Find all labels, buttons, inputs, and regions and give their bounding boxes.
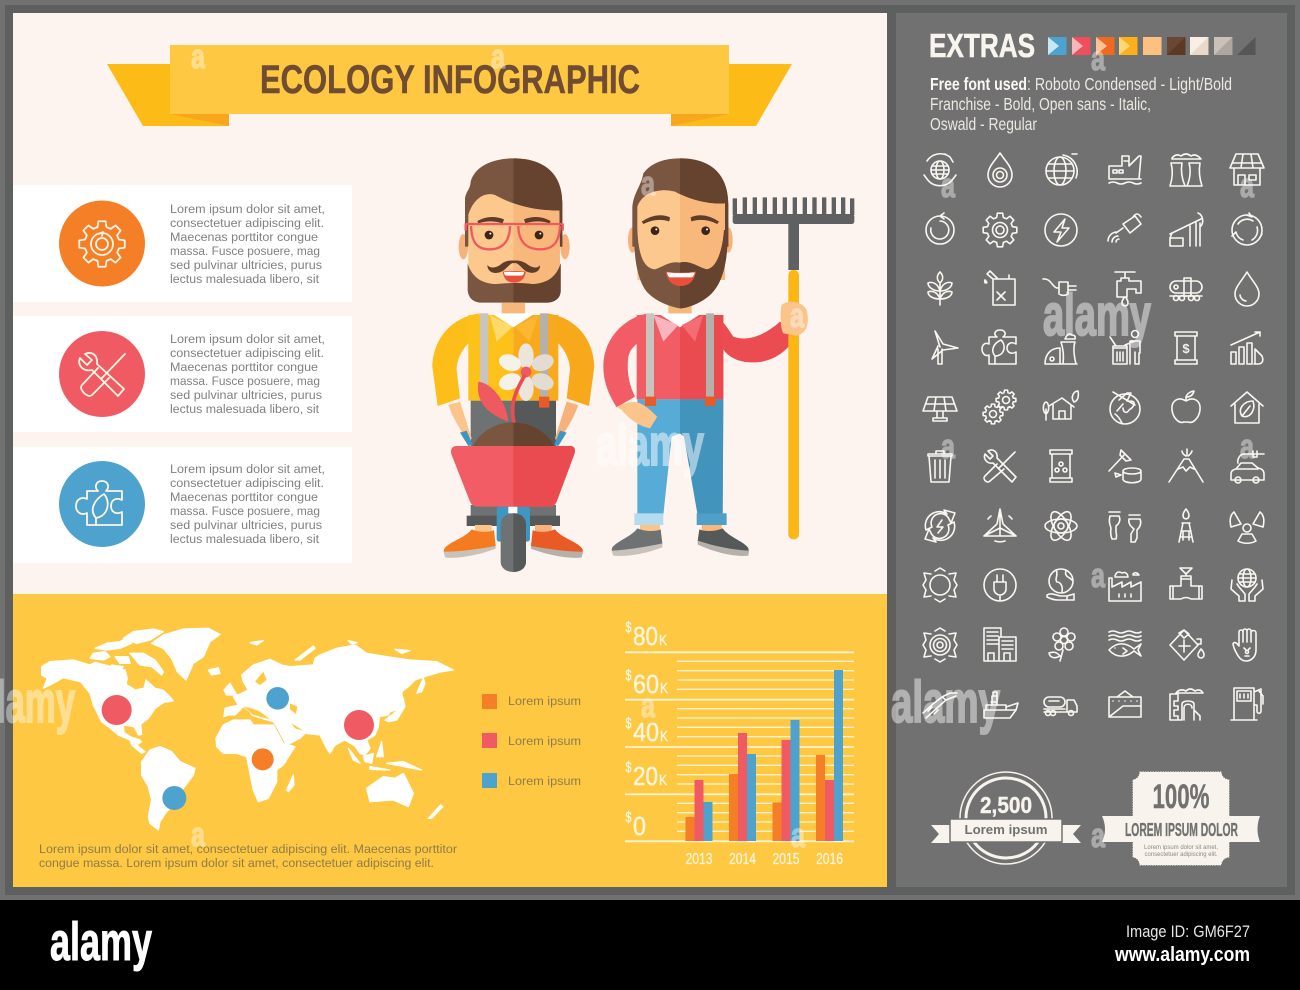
y axis labels	[626, 619, 668, 841]
icon: sun	[923, 568, 957, 602]
icon: ship	[984, 692, 1018, 718]
icon: turbine triangle	[984, 509, 1016, 542]
icon: plug cable	[1043, 279, 1076, 295]
legend: Lorem ipsum	[508, 774, 581, 788]
y axis labels: $	[626, 715, 632, 732]
stock watermarks: alamy	[1043, 283, 1151, 348]
y axis labels: K	[660, 680, 668, 697]
card text	[170, 202, 325, 286]
icon: trash can	[928, 451, 952, 482]
stock watermarks: a	[791, 817, 806, 855]
card text	[170, 462, 325, 546]
icon: globe with arrows	[924, 154, 956, 186]
icon: pipe valve	[1170, 568, 1202, 599]
icon: house with leaf	[1231, 392, 1263, 423]
card text: Lorem ipsum dolor sit amet,	[170, 202, 325, 216]
card text: lectus malesuada libero, sit	[170, 402, 320, 416]
stock watermarks: a	[1091, 557, 1106, 595]
rake	[733, 197, 854, 539]
colour swatches	[1048, 37, 1256, 55]
icon: tanker truck	[1044, 697, 1077, 716]
stock watermarks: a	[1091, 40, 1106, 78]
icon: water with fish	[1109, 631, 1141, 656]
map caption	[39, 842, 457, 870]
legend: Lorem ipsum	[508, 734, 581, 748]
heading: ECOLOGY INFOGRAPHIC	[260, 58, 640, 102]
panel: three text cards	[13, 185, 352, 563]
card text: sed pulvinar ultricies, purus	[170, 518, 322, 532]
bars 2016	[816, 670, 843, 841]
legend	[482, 694, 581, 788]
badge: 2,500 seal	[931, 772, 1081, 864]
icon: gear	[983, 213, 1017, 247]
font credits	[930, 74, 1232, 134]
y axis labels: 40	[633, 717, 659, 747]
icon: tanker wagon	[1170, 278, 1202, 300]
card text: massa. Fusce posuere, mag	[170, 244, 320, 258]
icon: solar house	[1230, 154, 1264, 185]
card text: lectus malesuada libero, sit	[170, 532, 320, 546]
stock watermarks: a	[941, 167, 956, 205]
y axis labels: 60	[633, 669, 659, 699]
stock watermarks: a	[491, 38, 506, 76]
icon: tools	[984, 450, 1016, 482]
icon: sun with circles	[923, 628, 957, 662]
panel: yellow data area	[13, 594, 887, 887]
card text: Lorem ipsum dolor sit amet,	[170, 462, 325, 476]
stock watermarks: a	[191, 38, 206, 76]
panel: extras sidebar	[896, 13, 1287, 887]
x axis years: 2013	[686, 851, 713, 868]
Central and South America, Africa, Oceania	[130, 720, 443, 830]
card text: Maecenas porttitor congue	[170, 490, 318, 504]
icon: radiation	[1230, 512, 1264, 543]
stock watermarks: alamy	[596, 413, 704, 478]
y axis labels: 0	[633, 811, 646, 841]
icon: growth chart	[1231, 332, 1263, 364]
icon: apple	[1172, 391, 1200, 422]
extras heading: EXTRAS	[929, 27, 1035, 64]
website: www.alamy.com	[1114, 944, 1250, 966]
card text: massa. Fusce posuere, mag	[170, 374, 320, 388]
icon: water tap	[1115, 272, 1141, 306]
x axis years: 2015	[772, 851, 800, 868]
illustration: two men with wheelbarrow and rake	[432, 158, 854, 572]
icon: fuel nozzle	[923, 693, 957, 718]
card text: consectetuer adipiscing elit.	[170, 216, 324, 230]
icon: gear with refresh	[79, 221, 125, 267]
card 1	[13, 185, 352, 302]
card text: sed pulvinar ultricies, purus	[170, 388, 322, 402]
map caption: congue massa. Lorem ipsum dolor sit amet, consectetuer adipiscing elit.	[39, 856, 434, 870]
icon: gas flame tower	[1179, 509, 1193, 542]
icon: watering can	[1108, 214, 1141, 242]
icon: solar panel	[923, 397, 957, 421]
icon: footprints	[1109, 512, 1141, 542]
icon: nuclear barrel	[1050, 450, 1072, 482]
y axis labels: 80	[633, 621, 658, 651]
stock watermarks: a	[641, 165, 656, 203]
icon: volcano	[1169, 449, 1203, 482]
man with rake	[603, 158, 854, 556]
footer bar	[0, 900, 1300, 990]
card text: Lorem ipsum dolor sit amet,	[170, 332, 325, 346]
icon: jerry can	[985, 271, 1015, 305]
stock watermarks: a	[641, 687, 656, 725]
card text: Maecenas porttitor congue	[170, 360, 318, 374]
stock watermarks: a	[1240, 428, 1255, 466]
icon: electric car	[1231, 451, 1264, 483]
icon: atom	[1045, 509, 1077, 543]
x axis years: 2016	[816, 851, 843, 868]
card text: Maecenas porttitor congue	[170, 230, 318, 244]
map markers	[102, 687, 374, 810]
icon: puzzle piece with leaf	[76, 481, 122, 525]
bar chart	[625, 619, 854, 868]
inland seas	[243, 672, 303, 731]
card text	[170, 332, 325, 416]
y axis labels: $	[626, 619, 632, 636]
font credits: Oswald - Regular	[930, 114, 1037, 134]
icon: water drop	[1235, 272, 1259, 306]
y axis labels: K	[659, 632, 667, 649]
icon: axe and stump	[1109, 450, 1141, 483]
icon: hand with radiation	[1233, 629, 1256, 661]
title banner	[107, 45, 792, 126]
legend: Lorem ipsum	[508, 694, 581, 708]
card text: consectetuer adipiscing elit.	[170, 346, 324, 360]
bars 2014	[729, 733, 756, 841]
stock watermarks: a	[191, 816, 206, 854]
man with wheelbarrow	[432, 158, 594, 572]
icon: nuclear plant	[1045, 334, 1077, 364]
bars 2013	[686, 780, 712, 841]
Eurasia	[224, 641, 453, 755]
y axis labels: K	[659, 772, 667, 789]
flower held in wheelbarrow	[478, 343, 556, 427]
badge: 100% label: consectetuer adipiscing elit.	[1144, 851, 1218, 858]
icon: pumpjack	[1170, 213, 1203, 246]
alamy logo: alamy	[50, 912, 152, 972]
card 2	[13, 316, 352, 432]
x axis years	[686, 851, 843, 868]
icon: puzzle with leaf	[982, 330, 1016, 364]
icon: globe arrow	[1046, 154, 1077, 185]
icon: dollar barrel: $	[1182, 341, 1190, 356]
icon: recycle lightning	[925, 510, 955, 542]
icon: hazard diamond drop	[1170, 630, 1204, 660]
icon: hand with earth	[1047, 569, 1074, 600]
font credits: Franchise - Bold, Open sans - Italic,	[930, 94, 1151, 114]
icon grid	[923, 153, 1264, 720]
image id: Image ID: GM6F27	[1126, 922, 1250, 941]
icon: circular arrow	[926, 213, 954, 244]
font credits: Free font used	[930, 74, 1027, 94]
icon: crossed wrench and screwdriver	[79, 353, 125, 396]
icon: two gears	[983, 390, 1016, 424]
stock watermarks: a	[1240, 167, 1255, 205]
icon: storage box	[1109, 691, 1141, 717]
icon: flower	[1049, 628, 1075, 661]
stock watermarks: alamy	[891, 670, 1000, 735]
card text: sed pulvinar ultricies, purus	[170, 258, 322, 272]
panel: illustration background	[13, 13, 887, 594]
icon: refinery with smoke	[1170, 689, 1203, 720]
icon: house with trees	[1043, 391, 1078, 420]
icon: buildings	[984, 628, 1016, 661]
world map	[42, 628, 453, 830]
badge: 100% label: Lorem ipsum dolor sit amet,	[1144, 844, 1218, 851]
icon: lightning circle	[1045, 214, 1077, 246]
icon: hands holding globe	[1231, 569, 1263, 601]
icon: dollar barrel	[1175, 332, 1197, 364]
card text: consectetuer adipiscing elit.	[170, 476, 324, 490]
badge: 100% label: 100%	[1152, 778, 1210, 816]
map caption: Lorem ipsum dolor sit amet, consectetuer adipiscing elit. Maecenas porttitor	[39, 842, 457, 856]
icon: cooling towers	[1170, 154, 1202, 186]
y axis labels: 20	[633, 761, 658, 791]
icon: plant	[928, 272, 952, 305]
y axis labels: $	[626, 809, 632, 826]
card text: lectus malesuada libero, sit	[170, 272, 320, 286]
icon: drop with circle	[988, 153, 1012, 187]
icon: plane over earth	[1110, 392, 1140, 424]
icon: recycle circle	[1232, 213, 1262, 245]
y axis labels: $	[626, 759, 632, 776]
card 3	[13, 447, 352, 563]
badge: 2,500 seal: Lorem ipsum	[964, 822, 1048, 837]
x axis years: 2014	[729, 851, 756, 868]
card text: massa. Fusce posuere, mag	[170, 504, 320, 518]
stock watermarks: a	[941, 428, 956, 466]
icon: person at bin	[1110, 330, 1140, 364]
icon: gas pump	[1231, 688, 1263, 720]
badge: 2,500 seal: 2,500	[980, 792, 1032, 818]
Americas and Greenland	[42, 628, 220, 743]
stock watermarks: a	[790, 297, 805, 335]
icon: oil platform	[1109, 156, 1141, 184]
stock watermarks	[0, 38, 1255, 855]
y axis labels: $	[626, 667, 632, 684]
stock watermarks: a	[1091, 817, 1106, 855]
icon: wind turbine	[932, 331, 958, 364]
badge: 100% label	[1102, 772, 1260, 865]
icon: plug in circle	[984, 569, 1016, 601]
font credits: : Roboto Condensed - Light/Bold	[1027, 74, 1232, 94]
bars 2015	[772, 720, 800, 841]
y axis labels: K	[660, 728, 668, 745]
icon: factory with clouds	[1109, 572, 1141, 601]
